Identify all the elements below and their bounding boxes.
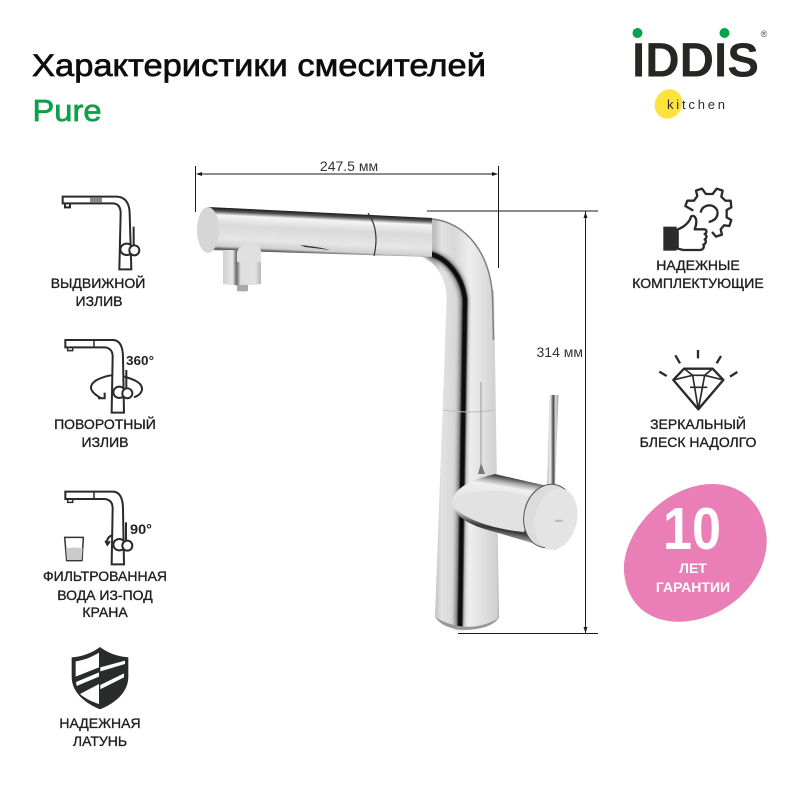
handle cap: [518, 480, 580, 552]
icon: filter faucet: [65, 492, 132, 564]
faucet column: [435, 290, 499, 627]
lever: [547, 395, 558, 490]
faucet: iddis: [555, 518, 563, 523]
height dimension: 314 мм: [536, 344, 583, 360]
width dimension: 247.5 мм: [320, 158, 378, 174]
label: ВОДА ИЗ-ПОД: [57, 587, 153, 603]
logo: IDDIS kitchen: [632, 28, 768, 124]
warranty years: 10: [663, 496, 721, 562]
label: ВЫДВИЖНОЙ: [51, 274, 145, 291]
icon: shield: [72, 647, 128, 709]
icon: glass of water: [65, 537, 83, 561]
logo: IDDIS kitchen: kitchen: [667, 97, 725, 112]
handle body: [452, 474, 556, 550]
feature: reliable components: [632, 189, 764, 291]
label: НАДЕЖНАЯ: [59, 715, 141, 731]
label: БЛЕСК НАДОЛГО: [640, 434, 757, 450]
warranty badge: [624, 484, 767, 622]
feature: mirror shine: [640, 350, 757, 450]
icon: diamond: [659, 350, 737, 409]
icon: gear and thumb: [663, 189, 731, 251]
feature: swivel spout: [54, 340, 156, 450]
column seam and rod: [444, 382, 494, 474]
feature: pull-out spout: [51, 197, 145, 309]
subtitle: Pure: Pure: [32, 93, 102, 128]
feature: reliable brass: [59, 647, 141, 749]
spout nozzle: [223, 243, 261, 292]
column base: [435, 617, 499, 630]
icon: pull-out faucet: [63, 197, 139, 269]
feature: filtered water: [43, 492, 167, 620]
pink blob: [624, 484, 767, 622]
label: КОМПЛЕКТУЮЩИЕ: [632, 275, 764, 291]
label: КРАНА: [82, 604, 128, 620]
height dimension: [427, 211, 598, 634]
title: Характеристики смесителей: [32, 47, 486, 83]
label: ПОВОРОТНЫЙ: [54, 415, 156, 432]
label: ЗЕРКАЛЬНЫЙ: [650, 415, 746, 432]
faucet bend: [420, 218, 494, 340]
faucet spout: [208, 207, 432, 257]
faucet: [197, 207, 583, 630]
warranty label: ЛЕТ: [679, 560, 707, 576]
logo: IDDIS kitchen: IDDIS: [632, 34, 759, 88]
width dimension: [196, 158, 498, 268]
icon: swivel faucet: [65, 340, 142, 413]
chrome reflection: [428, 254, 464, 628]
label: ИЗЛИВ: [82, 434, 128, 450]
badge: 90 degrees: 90°: [130, 522, 152, 537]
warranty label: ГАРАНТИИ: [656, 579, 730, 595]
label: ИЗЛИВ: [76, 293, 122, 309]
logo: IDDIS kitchen: ®: [761, 29, 768, 39]
label: ЛАТУНЬ: [73, 733, 127, 749]
label: ФИЛЬТРОВАННАЯ: [43, 568, 167, 584]
badge: 360 degrees: 360°: [126, 354, 154, 368]
label: НАДЕЖНЫЕ: [656, 257, 740, 273]
spout end cap: [197, 207, 219, 253]
